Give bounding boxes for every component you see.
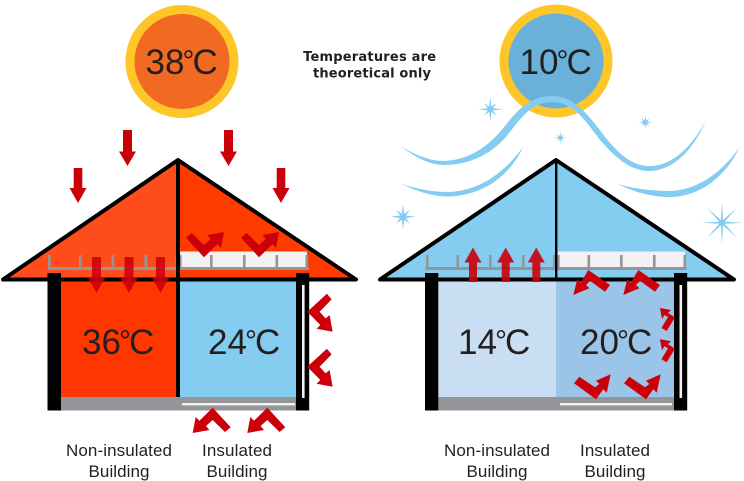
- room temperature 20°C: 20: [580, 323, 619, 362]
- room temperature 20°C: C: [627, 323, 652, 362]
- left building labels: Non-insulated: [66, 441, 172, 460]
- room temperature 36°C: C: [129, 323, 154, 362]
- room temperature 14°C: C: [505, 323, 530, 362]
- room temperature 20°C: °: [617, 325, 629, 358]
- hot sun 38°C: C: [192, 43, 218, 82]
- arrows escaping through uninsulated ceiling: [464, 248, 545, 282]
- right wall with insulation: [296, 273, 309, 410]
- roof fill right half: insulated: [178, 160, 356, 280]
- left building labels: Building: [206, 462, 268, 481]
- right building labels: Insulated: [580, 441, 650, 460]
- room temperature 24°C: °: [245, 325, 257, 358]
- note: temperatures are theoretical only: Temperatures are: [303, 50, 436, 65]
- cold sun 10°C: [504, 9, 608, 113]
- right building labels: Building: [584, 462, 646, 481]
- ceiling joists: [48, 255, 309, 270]
- room temperature 36°C: °: [119, 325, 131, 358]
- left building labels: [66, 441, 272, 481]
- left wall: [425, 273, 438, 410]
- arrows bouncing off insulated wall: [307, 294, 333, 387]
- floor slab: [60, 397, 297, 410]
- room temperature 24°C: C: [255, 323, 280, 362]
- roof outline: [3, 160, 356, 398]
- ceiling insulation: [558, 252, 685, 268]
- left wall: [48, 273, 61, 410]
- arrows reflected from insulated ceiling: [573, 270, 660, 295]
- arrows reflected from insulated floor: [574, 374, 661, 399]
- roof fill left half: non-insulated: [3, 160, 178, 280]
- arrows bouncing off insulated floor: [193, 408, 285, 433]
- note: temperatures are theoretical only: theoretical only: [313, 67, 432, 82]
- wind swooshes: [400, 96, 740, 197]
- floor insulation: [560, 403, 672, 405]
- room: insulated 20°C: [556, 280, 674, 398]
- right building labels: Building: [466, 462, 528, 481]
- room: non-insulated 14°C: [438, 280, 556, 398]
- floor slab: [438, 397, 675, 410]
- cold sun 10°C: °: [556, 45, 568, 78]
- arrows bouncing off insulated ceiling: [186, 232, 279, 257]
- ceiling joists: [426, 255, 686, 270]
- left building labels: Insulated: [202, 441, 272, 460]
- room: insulated 24°C: [178, 280, 296, 398]
- right building labels: Non-insulated: [444, 441, 550, 460]
- left building: [3, 160, 356, 433]
- sun heat arrows: [70, 130, 290, 203]
- arrows passing through uninsulated ceiling: [88, 257, 170, 293]
- roof centre line: [555, 160, 557, 280]
- right building: [380, 160, 734, 410]
- room: non-insulated 36°C: [61, 280, 178, 398]
- cold sun 10°C: 10: [520, 43, 558, 82]
- ceiling insulation: [180, 252, 307, 268]
- room temperature 24°C: 24: [208, 323, 247, 362]
- room temperature 14°C: 14: [458, 323, 497, 362]
- roof fill: [380, 160, 734, 280]
- room temperature 36°C: 36: [82, 323, 121, 362]
- right wall with insulation: [674, 273, 687, 410]
- snowflakes: [390, 97, 743, 244]
- left building labels: Building: [88, 462, 150, 481]
- hot sun 38°C: 38: [146, 43, 184, 82]
- floor insulation: [182, 403, 295, 405]
- room temperature 14°C: °: [495, 325, 507, 358]
- note: temperatures are theoretical only: [303, 50, 436, 82]
- roof outline: [380, 160, 734, 280]
- hot sun 38°C: [130, 10, 234, 114]
- hot sun 38°C: °: [182, 45, 194, 78]
- cold sun 10°C: C: [566, 43, 592, 82]
- right building labels: [444, 441, 650, 481]
- arrows reflected from insulated wall: [660, 308, 675, 362]
